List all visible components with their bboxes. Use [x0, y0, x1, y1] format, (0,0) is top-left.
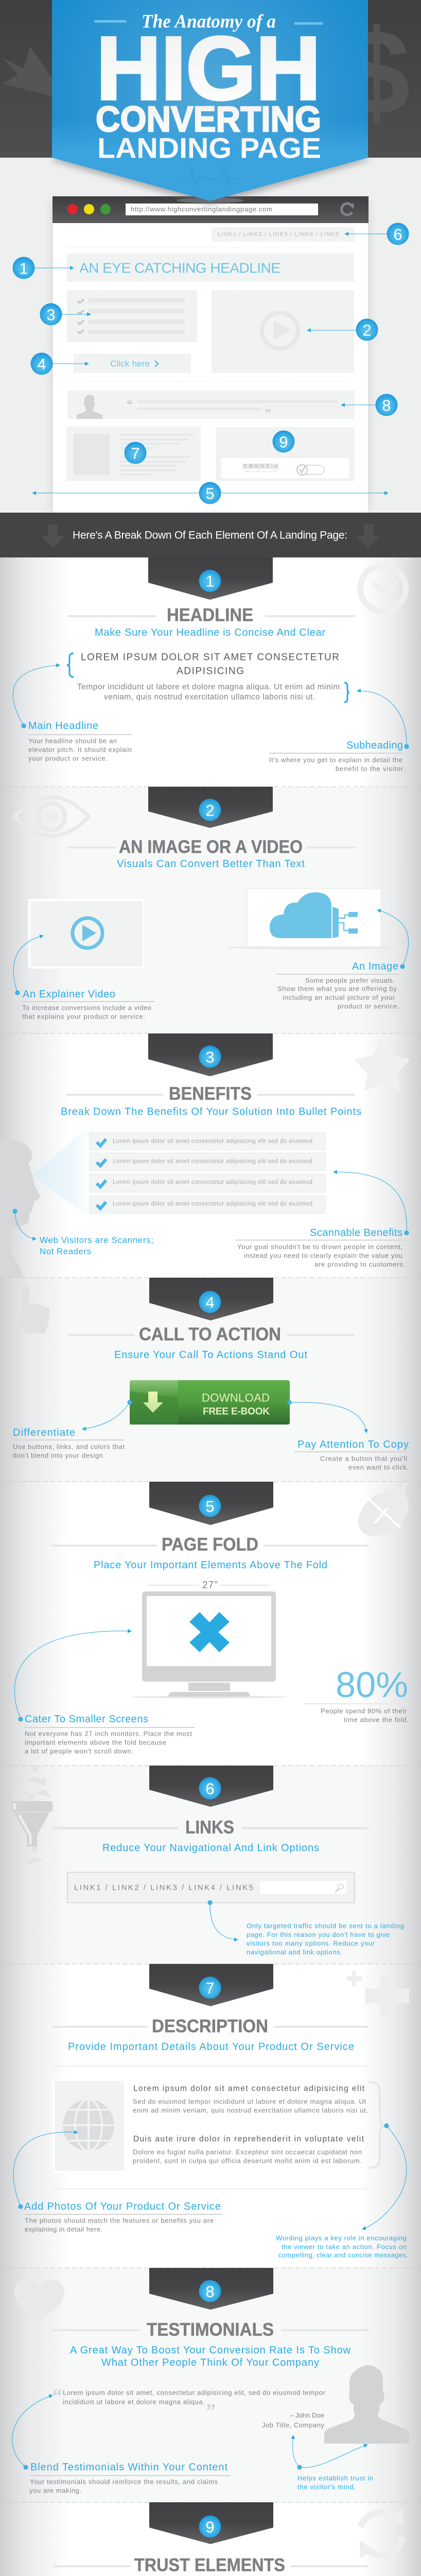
browser mockup — [12, 196, 409, 513]
image frame — [226, 887, 401, 950]
callout: smaller screens: a lot of people won't scroll down. — [25, 1748, 133, 1755]
icon: monitor — [131, 1591, 288, 1698]
callout: scannable benefits: Scannable Benefits — [310, 1227, 402, 1239]
description text 1: Sed do eiusmod tempor incididunt ut labore et dolore magna aliqua. Ut — [133, 2098, 366, 2105]
arrow: links — [208, 1900, 238, 1940]
product photo — [54, 2080, 125, 2172]
panel: benefits — [0, 1033, 409, 1277]
icon: circuit — [332, 907, 358, 938]
download button: FREE E-BOOK — [203, 1406, 270, 1417]
icon: mouse — [349, 1481, 417, 1546]
arrow: scannable benefits — [334, 1172, 409, 1235]
heading — [67, 605, 355, 625]
icon: down arrow right — [356, 524, 380, 548]
arrows: trust — [293, 2435, 367, 2470]
badge 6 — [149, 1766, 273, 1807]
subheading: Reduce Your Navigational And Link Options — [102, 1842, 319, 1854]
callout: scanners — [40, 1235, 153, 1256]
callout: links: visitors too many options. Reduce your — [247, 1939, 375, 1947]
quote: – John Doe — [290, 2411, 324, 2419]
icon: heartbeat — [182, 166, 239, 185]
panel: image or video — [13, 787, 409, 1020]
intro text: Here's A Break Down Of Each Element Of A Landing Page: — [73, 530, 347, 541]
callout: subheading: It's where you get to explain in detail the — [269, 756, 402, 764]
badge 3 — [148, 1033, 273, 1076]
icon: search — [335, 1884, 343, 1892]
callout: blend — [29, 2462, 231, 2495]
icon: down arrow left — [41, 524, 65, 548]
title: converting: CONVERTING — [96, 99, 321, 139]
callout: pay attention: even want to click. — [348, 1463, 409, 1471]
arrow: scanners — [12, 1209, 36, 1239]
heading — [52, 2319, 369, 2340]
testimonial placeholder: ” — [265, 407, 271, 420]
callout: differentiate: Use buttons, links, and colors that — [13, 1443, 125, 1451]
subheading: What Other People Think Of Your Company — [101, 2357, 319, 2368]
nav bar: LINK1 / LINK2 / LINK3 / LINK4 / LINK5 — [74, 1884, 253, 1892]
callout: smaller screens: Cater To Smaller Screens — [25, 1714, 148, 1725]
icon: eye — [14, 798, 89, 836]
heading: LINKS — [185, 1818, 234, 1837]
badge 9 — [149, 2502, 273, 2544]
callout: an image: Some people prefer visuals. — [305, 977, 395, 984]
sample headline — [81, 652, 339, 677]
stat: 80 percent: time above the fold. — [344, 1716, 409, 1724]
callout: subheading: Subheading — [346, 740, 403, 751]
dark top band — [0, 0, 421, 158]
badge 2 — [148, 787, 273, 828]
arrow: wording — [362, 2124, 407, 2229]
grey brace — [369, 2082, 385, 2168]
description text 2 — [133, 2135, 364, 2165]
arrow: smaller screens — [14, 1631, 131, 1722]
callout 2: 2 — [362, 321, 372, 339]
icon: cloud — [270, 892, 331, 938]
monitor size label: 27" — [202, 1580, 218, 1591]
sample subheading: veniam, quis nostrud exercitation ullamco laboris nisi ut. — [104, 692, 315, 702]
badge 2: 2 — [205, 802, 215, 819]
description text 1: enim ad minim veniam, quis nostrud exercitation ullamco laboris nisi ut. — [133, 2106, 368, 2114]
trust placeholder — [216, 427, 355, 481]
arrow: main headline — [13, 665, 60, 728]
stat: 80 percent — [304, 1665, 409, 1724]
testimonial placeholder: “ — [127, 398, 133, 412]
testimonial placeholder — [67, 391, 355, 420]
heading — [51, 1534, 369, 1555]
download button — [130, 1380, 290, 1425]
title: landing page: LANDING PAGE — [97, 132, 321, 164]
sample subheading — [77, 683, 340, 702]
callout: wording: the viewer to take an action. Focus on — [282, 2243, 407, 2250]
callout 1: 1 — [19, 260, 28, 277]
description text 1 — [133, 2084, 368, 2114]
bullet list — [90, 1132, 325, 1213]
callout: differentiate — [12, 1427, 125, 1459]
callout 9 — [273, 431, 294, 452]
trust placeholder: TRUST-e — [243, 464, 278, 469]
callout: wording: Wording plays a key role in encouraging — [276, 2234, 407, 2242]
callout: trust — [297, 2474, 373, 2490]
callout: differentiate: Differentiate — [13, 1427, 75, 1438]
heading: CALL TO ACTION — [139, 1324, 281, 1345]
icon: clock — [360, 566, 406, 611]
quote: ” — [206, 2400, 216, 2422]
title: the anatomy of a: The Anatomy of a — [142, 11, 276, 32]
stat: 80 percent: 80% — [336, 1665, 408, 1705]
arrow: blend — [12, 2395, 52, 2470]
panel: call to action — [12, 1278, 409, 1471]
intro band — [0, 513, 421, 557]
icon: hand — [12, 1285, 49, 1333]
description text 1: Lorem ipsum dolor sit amet consectetur adipisicing elit — [133, 2084, 365, 2093]
brace left — [67, 653, 74, 677]
panel: description — [13, 1964, 409, 2259]
bullet row 2 — [90, 1153, 325, 1171]
heading — [52, 1818, 369, 1837]
icon: dollar sign: $ — [343, 4, 410, 140]
heading: DESCRIPTION — [152, 2016, 268, 2036]
callout: smaller screens — [24, 1714, 195, 1755]
download button: DOWNLOAD — [202, 1391, 270, 1404]
arrow: differentiate — [82, 1400, 132, 1429]
callout: blend: you are making. — [29, 2486, 81, 2495]
click here button placeholder — [74, 354, 191, 373]
badge 5 — [149, 1482, 273, 1525]
heading — [66, 1084, 355, 1104]
callout: differentiate: don't blend into your design. — [13, 1452, 105, 1459]
quote: Lorem ipsum dolor sit amet, consectetur adipisicing elit, sed do eiusmod tempor — [63, 2388, 326, 2397]
panel: trust elements — [14, 2502, 410, 2576]
heading: AN IMAGE OR A VIDEO — [119, 837, 303, 857]
browser toolbar — [52, 196, 369, 223]
subheading: A Great Way To Boost Your Conversion Rate Is To Show — [70, 2345, 351, 2356]
title: high: HIGH — [96, 18, 321, 118]
callout: pay attention — [294, 1439, 409, 1471]
arrow: video — [13, 936, 43, 995]
callout 6: 6 — [393, 226, 402, 243]
nav links placeholder — [212, 227, 355, 242]
callout: blend: Blend Testimonials Within Your Content — [30, 2462, 227, 2473]
callout: explainer video: that explains your product or service. — [22, 1013, 145, 1020]
sample headline: LOREM IPSUM DOLOR SIT AMET CONSECTETUR — [81, 652, 339, 663]
bullet row 4 — [90, 1196, 325, 1213]
badge 7 — [149, 1964, 273, 2006]
heading: PAGE FOLD — [162, 1534, 258, 1555]
callout: scanners: Not Readers — [40, 1247, 91, 1256]
headline placeholder: AN EYE CATCHING HEADLINE — [79, 260, 280, 276]
heading — [67, 1324, 355, 1345]
callout 7 — [125, 442, 146, 464]
icon: head silhouette — [0, 1139, 40, 1277]
callout 9: 9 — [279, 433, 288, 451]
callout: subheading: benefit to the visitor. — [336, 765, 405, 773]
bullet row 1 — [90, 1132, 325, 1150]
callout 5: 5 — [205, 484, 215, 503]
bullet row 1: Lorem ipsum dolor sit amet consectetur adipisicing elit sed do eiusmod — [113, 1139, 312, 1145]
callout: photos — [24, 2201, 222, 2233]
callout: wording: compelling, clear and concise messages. — [278, 2251, 408, 2259]
callout: an image — [277, 961, 399, 1010]
callout: an image: including an actual picture of your — [283, 993, 395, 1002]
nav bar — [67, 1872, 355, 1903]
badge 9: 9 — [205, 2518, 215, 2536]
callout: photos: The photos should match the features or benefits you are — [25, 2216, 214, 2225]
subheading: Make Sure Your Headline is Concise And Clear — [95, 627, 325, 638]
sample subheading: Tempor incididunt ut labore et dolore magna aliqua. Ut enim ad minim — [77, 683, 340, 691]
badge 6: 6 — [205, 1780, 215, 1798]
scan beam — [32, 1127, 103, 1228]
description text 2: Duis aute irure dolor in reprehenderit in voluptate velit — [133, 2135, 364, 2143]
callout: wording — [276, 2234, 408, 2259]
url text: http://www.highconvertinglandingpage.com — [131, 205, 272, 213]
heading — [67, 837, 355, 857]
bullet row 3: Lorem ipsum dolor sit amet consectetur adipisicing elit sed do eiusmod — [113, 1179, 312, 1185]
icon: plus signs — [346, 1971, 409, 2018]
heading — [53, 2555, 369, 2575]
callout: an image: Show them what you are offering by — [277, 985, 397, 992]
callout: pay attention: Pay Attention To Copy — [297, 1439, 409, 1450]
callout: photos: explaining in detail here. — [25, 2226, 102, 2233]
callout: links — [247, 1922, 404, 1956]
panel: page fold — [14, 1481, 417, 1755]
callout: explainer video: To increase conversions include a video — [22, 1004, 151, 1012]
badge 8 — [149, 2268, 273, 2310]
badge 5: 5 — [205, 1497, 215, 1516]
subheading — [70, 2345, 351, 2368]
callout: links: page. For this reason you don't have to give — [247, 1931, 390, 1938]
callout: scannable benefits — [235, 1227, 405, 1268]
callout: subheading — [269, 740, 405, 773]
stat: 80 percent: People spend 80% of their — [321, 1707, 407, 1715]
callout: an image: product or service. — [338, 1003, 399, 1010]
callout 4: 4 — [37, 355, 46, 373]
heading: BENEFITS — [169, 1084, 252, 1104]
arrow: subheading — [357, 691, 409, 749]
quote: “ — [52, 2385, 62, 2407]
subheading: Break Down The Benefits Of Your Solution Into Bullet Points — [61, 1106, 361, 1117]
callout: scanners: Web Visitors are Scanners; — [40, 1235, 153, 1245]
callout: trust: the visitor's mind. — [297, 2483, 356, 2490]
callout 3 — [40, 303, 91, 326]
callout: smaller screens: important elements above the fold because — [25, 1738, 166, 1747]
video frame — [29, 900, 144, 968]
icon: refresh — [342, 204, 354, 215]
heading — [52, 2016, 369, 2036]
callout: explainer video: An Explainer Video — [23, 989, 115, 1000]
bullets placeholder — [67, 290, 197, 342]
callout: main headline: elevator pitch. It should explain — [28, 746, 132, 753]
subheading: Provide Important Details About Your Product Or Service — [68, 2041, 354, 2053]
callout: links: navigational and link options. — [247, 1948, 342, 1956]
callout: an image: An Image — [352, 961, 398, 972]
heading: HEADLINE — [167, 605, 253, 625]
callout 4 — [31, 352, 89, 375]
arrow: pay attention — [287, 1400, 366, 1433]
callout: main headline: Main Headline — [28, 720, 98, 732]
bullet row 3 — [90, 1174, 325, 1192]
description text 2: Dolore eu fugiat nulla pariatur. Excepteur sint occaecat cupidatat non — [133, 2148, 362, 2156]
callout 8: 8 — [382, 397, 391, 414]
heading: TRUST ELEMENTS — [134, 2555, 285, 2575]
icon: sync — [360, 2509, 403, 2558]
callout 3: 3 — [46, 306, 56, 324]
description text 2: proident, sunt in culpa qui officia deserunt mollit anim id est laborum. — [133, 2157, 362, 2165]
click here button placeholder: Click here — [110, 359, 150, 369]
title banner — [52, 0, 368, 205]
headline placeholder — [67, 253, 354, 282]
badge 4 — [149, 1278, 273, 1320]
brace right — [344, 683, 349, 702]
trust placeholder: Make privacy your choice™ — [244, 470, 278, 473]
icon: download arrow — [143, 1392, 163, 1413]
callout: scannable benefits: are providing to customers. — [314, 1260, 405, 1268]
callout: blend: Your testimonials should reinforce the results, and claims — [30, 2478, 218, 2485]
callout: pay attention: Create a button that you'll — [320, 1455, 407, 1462]
callout 8 — [341, 394, 397, 416]
nav links placeholder: LINK1 / LINK2 / LINK3 / LINK4 / LINK5 — [218, 231, 339, 238]
callout: smaller screens: Not everyone has 27 inch monitors. Place the most — [25, 1730, 192, 1737]
callout: links: Only targeted traffic should be sent to a landing — [247, 1922, 404, 1930]
heading: TESTIMONIALS — [147, 2319, 274, 2340]
icon: person — [324, 2365, 409, 2444]
icon: cursor arrow — [2, 46, 53, 96]
description placeholder — [66, 427, 201, 481]
badge 7: 7 — [205, 1979, 215, 1997]
icon: heart — [14, 2279, 64, 2321]
callout: main headline: Your headline should be an — [28, 737, 117, 745]
quote: incididunt ut labore et dolore magna aliqua. — [63, 2398, 205, 2406]
panel: links — [11, 1759, 404, 1956]
badge 1 — [148, 557, 273, 600]
quote: Job Title, Company — [262, 2421, 324, 2429]
callout: trust: Helps establish trust in — [297, 2474, 373, 2482]
icon: star — [357, 1040, 408, 1089]
video placeholder — [212, 290, 354, 373]
icon: funnel and people — [11, 1759, 52, 1865]
callout 2 — [307, 318, 378, 341]
callout: main headline — [28, 720, 132, 762]
bullet row 2: Lorem ipsum dolor sit amet consectetur adipisicing elit sed do eiusmod — [113, 1158, 312, 1164]
arrow: image — [377, 910, 409, 969]
callout 6 — [345, 223, 409, 245]
badge 4: 4 — [205, 1293, 215, 1312]
bullet row 4: Lorem ipsum dolor sit amet consectetur adipisicing elit sed do eiusmod — [113, 1201, 312, 1207]
callout 7: 7 — [131, 444, 140, 463]
panel: testimonials — [12, 2268, 409, 2495]
icon: globe — [63, 2099, 114, 2151]
badge 3: 3 — [205, 1048, 215, 1066]
callout: main headline: your product or service. — [28, 754, 108, 762]
quote — [52, 2385, 326, 2429]
callout: explainer video — [22, 989, 155, 1020]
subheading: Visuals Can Convert Better Than Text — [117, 858, 305, 870]
callout 1 — [12, 257, 74, 279]
callout 5 — [32, 482, 388, 504]
subheading: Ensure Your Call To Actions Stand Out — [114, 1349, 307, 1361]
sample headline: ADIPISICING — [177, 666, 244, 677]
badge 8: 8 — [205, 2282, 215, 2301]
subheading: Place Your Important Elements Above The Fold — [94, 1560, 327, 1571]
badge 1: 1 — [205, 572, 215, 590]
callout: photos: Add Photos Of Your Product Or Service — [24, 2201, 221, 2212]
panel: headline — [13, 557, 409, 773]
callout: scannable benefits: Your goal shouldn't be to drown people in content, — [237, 1243, 402, 1251]
arrow: photos — [13, 2132, 78, 2209]
callout: scannable benefits: instead you need to clearly explain the value you — [244, 1252, 402, 1259]
